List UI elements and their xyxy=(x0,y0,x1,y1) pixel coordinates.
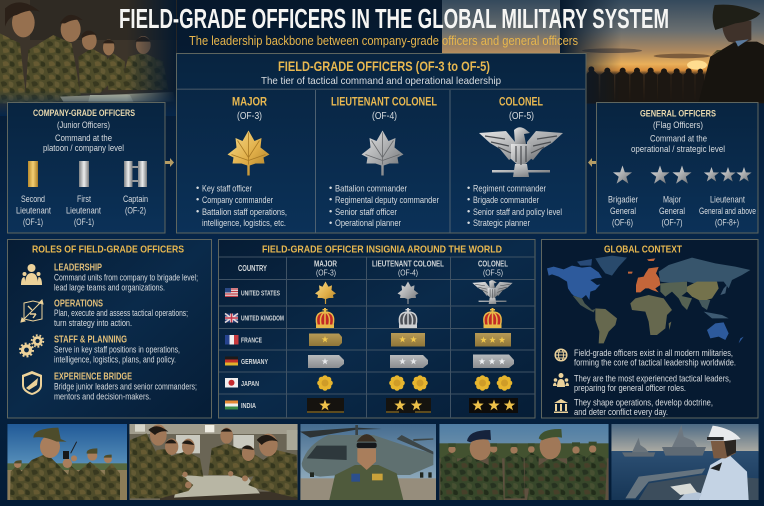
panel: general officers xyxy=(596,102,758,233)
role: experience bridge: mentors and decision-makers. xyxy=(54,392,151,402)
table header row: (OF-5) xyxy=(483,268,503,278)
lieutenant colonel duties: • xyxy=(329,206,332,216)
row: germany: GERMANY xyxy=(241,359,268,366)
role: operations: turn strategy into action. xyxy=(54,318,132,328)
lieutenant colonel duties: Regimental deputy commander xyxy=(335,195,439,205)
insignia: second lieutenant gold bar xyxy=(28,161,38,187)
colonel duties: Senior staff and policy level xyxy=(473,207,562,217)
rank label: lieutenant general and above: (OF-8+) xyxy=(715,218,739,228)
icon: one star xyxy=(613,166,632,184)
role: leadership: lead large teams and organizations. xyxy=(54,282,165,292)
photo: officers planning at a table xyxy=(129,424,298,500)
major duties: • xyxy=(196,183,199,193)
panel heading: FIELD-GRADE OFFICERS (OF-3 to OF-5) xyxy=(278,58,490,74)
panel: insignia table xyxy=(218,240,535,418)
lieutenant colonel duties: • xyxy=(329,183,332,193)
icon: people xyxy=(21,264,42,285)
rank label: captain: (OF-2) xyxy=(125,206,146,216)
row: united states xyxy=(225,280,513,304)
rank label: major general: Major xyxy=(663,194,681,204)
icon: shield xyxy=(22,371,42,395)
row: united states: UNITED STATES xyxy=(241,290,280,298)
general officers heading: GENERAL OFFICERS xyxy=(640,108,716,118)
context item: leaders: preparing for general officer roles. xyxy=(574,383,686,393)
row: india: INDIA xyxy=(241,403,256,410)
lieutenant colonel duties: Senior staff officer xyxy=(335,207,397,217)
flag: india xyxy=(225,400,238,410)
rank label: first lieutenant: First xyxy=(77,194,91,204)
rank label: captain: Captain xyxy=(123,194,148,204)
icon: people xyxy=(553,373,569,387)
rank label: second lieutenant: Lieutenant xyxy=(16,206,51,216)
context item: global xyxy=(555,348,736,368)
row: germany xyxy=(225,354,514,368)
rank label: brigadier general: Brigadier xyxy=(608,194,638,204)
row: india xyxy=(225,398,518,413)
icon: operations map xyxy=(21,300,43,322)
icon: silver eagle xyxy=(479,127,563,177)
colonel duties: Brigade commander xyxy=(473,195,539,205)
context item: leaders xyxy=(553,373,731,393)
table header row: MAJOR xyxy=(314,260,337,268)
rank label: first lieutenant xyxy=(66,194,101,227)
role: staff and planning: STAFF & PLANNING xyxy=(54,334,127,346)
rank label: brigadier general xyxy=(608,194,638,228)
lieutenant colonel duties: Operational planner xyxy=(335,218,401,228)
lieutenant colonel duties: • xyxy=(329,194,332,204)
panel: company-grade officers xyxy=(8,102,165,233)
major duties: intelligence, logistics, etc. xyxy=(202,218,286,228)
photo strip xyxy=(7,424,759,500)
rank label: major general xyxy=(659,194,685,228)
rank label: brigadier general: General xyxy=(610,206,636,216)
arrow: company-grade to field-grade xyxy=(165,158,174,167)
photo: naval officer and warships xyxy=(611,424,759,500)
rank label: second lieutenant: Second xyxy=(21,194,45,204)
major duties: • xyxy=(196,194,199,204)
role: experience bridge xyxy=(22,371,197,402)
rank label: second lieutenant: (OF-1) xyxy=(23,217,43,227)
role: experience bridge: EXPERIENCE BRIDGE xyxy=(54,372,132,382)
icon: gears xyxy=(20,335,43,356)
colonel duties: • xyxy=(467,183,470,193)
column: major xyxy=(196,96,287,228)
context item: doctrine xyxy=(554,398,713,417)
row: france xyxy=(225,333,511,346)
major duties: Key staff officer xyxy=(202,184,252,194)
subtitle: The leadership backbone between company-grade officers and general officers xyxy=(189,34,578,48)
rank label: captain xyxy=(123,194,148,216)
rank label: lieutenant general and above xyxy=(699,194,756,228)
major duties: • xyxy=(196,206,199,216)
colonel duties: • xyxy=(467,206,470,216)
company-grade heading: COMPANY-GRADE OFFICERS xyxy=(33,108,135,118)
flag: france xyxy=(225,335,238,344)
rank label: major general: (OF-7) xyxy=(662,218,682,228)
rank label: second lieutenant xyxy=(16,194,51,227)
photo: pilot and helicopter xyxy=(300,424,436,500)
colonel duties: • xyxy=(467,194,470,204)
arrow: general officers to field-grade xyxy=(588,158,597,167)
column: lieutenant colonel: LIEUTENANT COLONEL xyxy=(331,96,437,108)
general officers heading xyxy=(631,108,725,154)
row: france: FRANCE xyxy=(241,338,262,344)
icon: two stars xyxy=(650,166,692,184)
row: japan xyxy=(225,375,512,391)
icon: three stars xyxy=(704,167,752,181)
photo: officers studying a map xyxy=(0,0,177,116)
company-grade heading: platoon / company level xyxy=(43,143,124,153)
flag: united states xyxy=(225,288,238,297)
global context heading: GLOBAL CONTEXT xyxy=(604,244,682,256)
context item: doctrine: and deter conflict every day. xyxy=(574,407,668,417)
table header row: COUNTRY xyxy=(238,264,267,273)
role: staff and planning xyxy=(20,334,180,364)
rank label: major general: General xyxy=(659,206,685,216)
flag: japan xyxy=(225,378,238,388)
table header row: (OF-4) xyxy=(398,268,418,278)
column: colonel: COLONEL xyxy=(499,96,543,108)
table heading: FIELD-GRADE OFFICER INSIGNIA AROUND THE WORLD xyxy=(262,244,502,256)
general officers heading: operational / strategic level xyxy=(631,144,725,154)
role: leadership: LEADERSHIP xyxy=(54,262,102,274)
role: operations: Plan, execute and assess tactical operations; xyxy=(54,308,188,318)
photo: officer with radio xyxy=(7,424,127,500)
column: major: MAJOR xyxy=(232,96,268,108)
table header row: LIEUTENANT COLONEL xyxy=(372,260,444,268)
row: united kingdom: UNITED KINGDOM xyxy=(241,316,284,322)
role: staff and planning: Serve in key staff positions in operations, xyxy=(54,344,180,354)
lieutenant colonel duties: Battalion commander xyxy=(335,184,407,194)
panel: roles of field-grade officers xyxy=(8,240,212,418)
lieutenant colonel duties: • xyxy=(329,218,332,228)
rank label: lieutenant general and above: Lieutenant xyxy=(710,194,745,204)
major duties: Battalion staff operations, xyxy=(202,207,287,217)
world map xyxy=(547,256,750,343)
icon: globe xyxy=(555,349,567,361)
photo: officers talking before troops xyxy=(439,424,609,500)
column: colonel: (OF-5) xyxy=(509,111,534,122)
company-grade heading xyxy=(33,108,135,153)
icon: gold oak leaf xyxy=(228,130,270,176)
rank label: brigadier general: (OF-6) xyxy=(612,218,633,228)
company-grade heading: Command at the xyxy=(55,133,112,143)
role: leadership: Command units from company to brigade level; xyxy=(54,272,198,282)
colonel duties: Regiment commander xyxy=(473,184,546,194)
role: operations: OPERATIONS xyxy=(54,298,103,310)
lieutenant colonel duties xyxy=(329,183,439,228)
photo: officer and troops at sunset xyxy=(442,0,764,103)
column: major: (OF-3) xyxy=(237,111,262,122)
insignia: first lieutenant silver bar xyxy=(79,161,89,187)
general officers heading: Command at the xyxy=(650,134,707,144)
table header row xyxy=(238,260,508,278)
general officers heading: (Flag Officers) xyxy=(653,120,703,130)
insignia: captain double bars xyxy=(124,161,147,187)
company-grade heading: (Junior Officers) xyxy=(57,120,110,130)
major duties xyxy=(196,183,287,228)
colonel duties: Strategic planner xyxy=(473,218,530,228)
role: operations xyxy=(21,298,188,328)
role: leadership xyxy=(21,262,198,292)
panel: global context xyxy=(542,240,758,418)
context item: doctrine: They shape operations, develop doctrine, xyxy=(574,398,713,408)
column: lieutenant colonel: (OF-4) xyxy=(372,111,397,122)
colonel duties xyxy=(467,183,562,228)
panel subheading: The tier of tactical command and operational leadership xyxy=(261,75,501,87)
roles heading: ROLES OF FIELD-GRADE OFFICERS xyxy=(32,244,184,256)
icon: silver oak leaf xyxy=(362,130,404,176)
column: colonel xyxy=(467,96,563,228)
flag: united kingdom xyxy=(225,314,238,322)
major duties: Company commander xyxy=(202,195,273,205)
colonel duties: • xyxy=(467,218,470,228)
role: staff and planning: intelligence, logistics, plans, and policy. xyxy=(54,354,176,364)
table header row: COLONEL xyxy=(478,260,508,268)
rank label: first lieutenant: (OF-1) xyxy=(74,217,94,227)
table header row: (OF-3) xyxy=(316,268,336,278)
role: experience bridge: Bridge junior leaders and senior commanders; xyxy=(54,382,197,392)
context item: leaders: They are the most experienced tactical leaders, xyxy=(574,374,731,384)
row: japan: JAPAN xyxy=(241,381,259,388)
row: united kingdom xyxy=(225,308,502,328)
panel: field-grade officers xyxy=(176,54,586,233)
column: lieutenant colonel xyxy=(329,96,439,228)
rank label: first lieutenant: Lieutenant xyxy=(66,206,101,216)
icon: institution xyxy=(554,399,568,413)
flag: germany xyxy=(225,356,238,366)
